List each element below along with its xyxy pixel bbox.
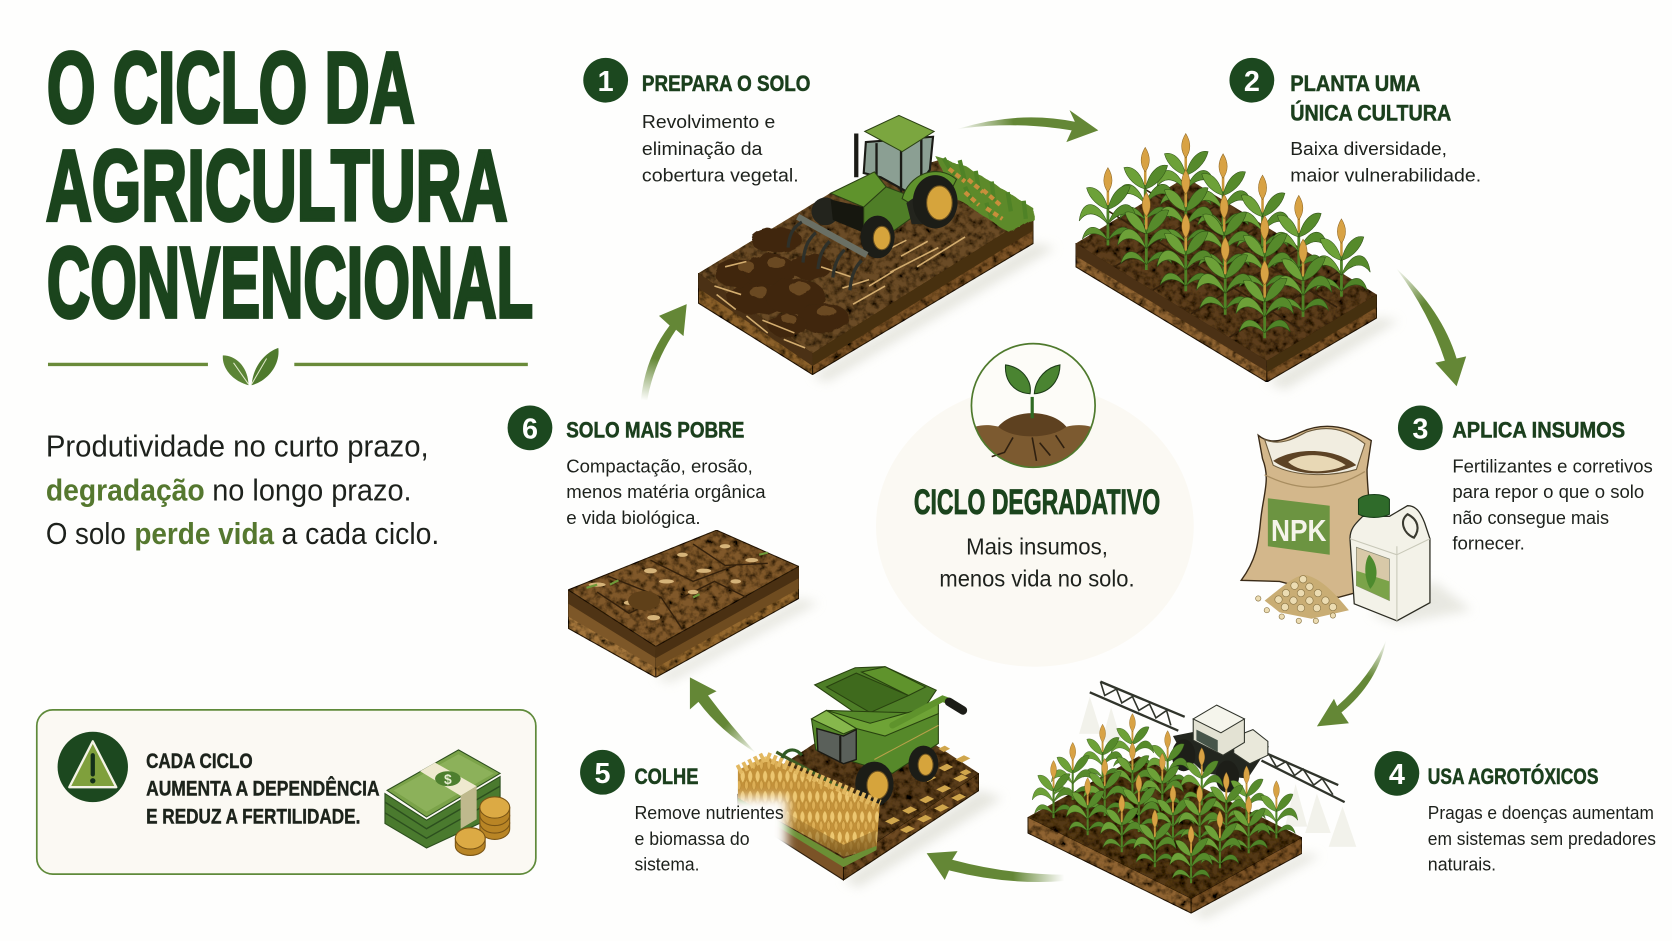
arrow: step 4 to 5 [927,851,1064,882]
step 6 label: 6 [522,414,538,446]
step 6 label: e vida biológica. [566,507,701,528]
cultivator [788,217,867,290]
step 3 label: APLICA INSUMOS [1452,417,1625,442]
step 1 label: eliminação da [642,138,763,159]
sprayer [1079,682,1356,847]
sack [1241,426,1371,597]
icon: money stack and coins [385,750,510,855]
step 5 label: COLHE [634,764,699,789]
illustration: NPK sack, granules and jug [1241,426,1472,624]
illustration: tilled soil block with tractor [698,115,1056,382]
wheat [738,756,880,857]
step 1 label [583,58,810,186]
title: O CICLO DA [47,32,415,144]
tractor [811,115,958,258]
step 4 label: 4 [1389,759,1405,791]
step 2 label [1229,58,1481,186]
step 2 label: PLANTA UMA [1290,71,1420,96]
icon: money stack and coins: $ [444,771,452,787]
step 2 label: maior vulnerabilidade. [1290,165,1481,186]
arrow: step 5 to 6 [690,677,756,753]
step 4 label [1374,751,1656,874]
center text: Mais insumos, [966,534,1108,560]
intro text: a cada ciclo. [282,517,439,551]
white halo behind text [631,798,787,855]
corn plants [1079,134,1370,338]
intro text: Produtividade no curto prazo, [46,430,429,464]
callout panel [37,710,536,874]
step 1 label: Revolvimento e [642,111,775,132]
intro text: O solo [46,517,126,551]
combine [776,667,963,806]
step 1 label: 1 [598,66,614,98]
step 6 label: Compactação, erosão, [566,456,753,477]
center text: menos vida no solo. [939,566,1135,592]
illustration: corn block and sprayer [1028,682,1356,919]
step 2 label: 2 [1244,66,1260,98]
step 2 label: ÚNICA CULTURA [1290,101,1451,126]
icon: sprout on cracked soil [971,344,1095,467]
step 3 label [1398,405,1653,553]
step 5 label: 5 [594,758,610,790]
step 1 label: PREPARA O SOLO [642,71,810,96]
crop strip [936,157,1033,233]
step 3 label: para repor o que o solo [1452,481,1644,502]
step 4 label: em sistemas sem predadores [1428,828,1656,849]
step 1 label: cobertura vegetal. [642,165,799,186]
title: CONVENCIONAL [47,227,533,339]
divider with leaf icon [48,348,528,385]
step 6 label: SOLO MAIS POBRE [566,417,744,442]
step 3 label: fornecer. [1452,532,1525,553]
illustration: combine harvester block [631,667,1002,887]
callout text: CADA CICLO [146,749,253,773]
center heading: CICLO DEGRADATIVO [914,483,1160,522]
title [46,32,533,339]
arrow: step 2 to 3 [1396,268,1466,386]
step 5 label: e biomassa do [634,828,750,849]
intro text [46,430,439,551]
title: AGRICULTURA [46,130,508,242]
center text [939,534,1135,592]
illustration: degraded soil block [568,530,819,683]
step 6 label [508,405,766,528]
callout text: E REDUZ A FERTILIDADE. [146,804,360,828]
step 3 label: 3 [1412,414,1428,446]
stubble [885,746,971,833]
granules [1265,575,1349,619]
corn plants [1032,714,1298,883]
arrow: step 6 to 1 [641,304,687,400]
illustration: monoculture corn block [1076,134,1399,389]
step 4 label: naturais. [1428,853,1496,874]
callout text: AUMENTA A DEPENDÊNCIA [146,776,380,801]
center panel: ciclo degradativo [876,344,1194,667]
intro text: no longo prazo. [212,473,412,507]
arrow: step 3 to 4 [1317,640,1386,726]
icon: warning [58,732,128,802]
step 5 label [580,750,784,874]
step 3 label: Fertilizantes e corretivos [1452,456,1653,477]
intro text: perde vida [134,517,275,551]
step 4 label: USA AGROTÓXICOS [1428,764,1598,789]
step 3 label: não consegue mais [1452,507,1609,528]
step 6 label: menos matéria orgânica [566,481,766,502]
step 2 label: Baixa diversidade, [1290,138,1447,159]
intro text: degradação [46,473,205,507]
step 5 label: sistema. [634,853,700,874]
jug [1350,506,1430,621]
step 4 label: Pragas e doenças aumentam [1428,802,1654,823]
arrow: step 1 to 2 [956,110,1098,142]
illustration: NPK sack, granules and jug: NPK [1271,513,1327,548]
callout text [146,749,380,828]
step 5 label: Remove nutrientes [634,802,784,823]
